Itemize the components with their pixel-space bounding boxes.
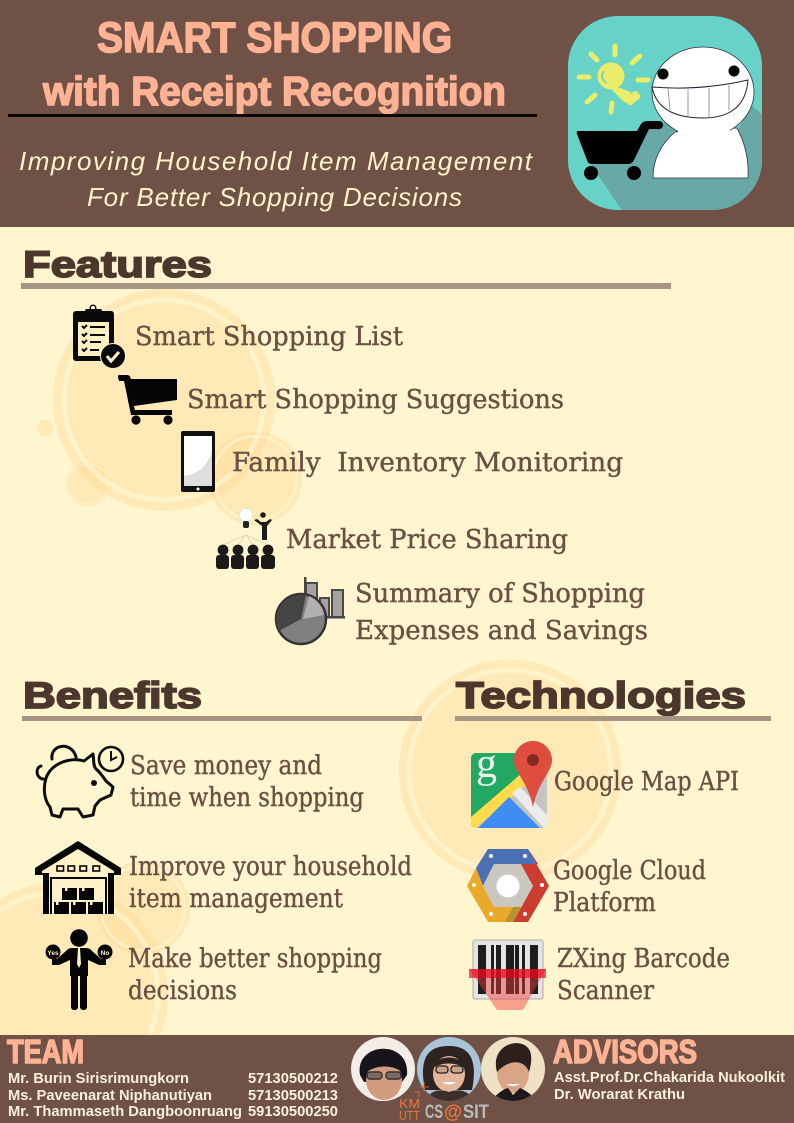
heading: benefits <box>22 675 422 721</box>
icon: man with yes and no <box>46 929 112 1010</box>
text: google cloud platform: Platform <box>553 888 656 918</box>
text: better decisions <box>128 944 382 1006</box>
icon: man with yes and no: No <box>101 950 109 957</box>
icon: app logo <box>568 16 764 212</box>
text: improve household <box>129 852 412 914</box>
heading: benefits: Benefits <box>23 675 202 716</box>
title: SMART SHOPPING <box>97 14 452 62</box>
text: zxing barcode scanner: ZXing Barcode <box>557 944 730 974</box>
text: better decisions: decisions <box>128 976 237 1006</box>
icon: barcode scanner <box>469 940 546 1010</box>
logo: CS@SIT: @ <box>444 1102 462 1123</box>
icon: pie and bar chart <box>276 577 345 644</box>
logo: KMUTT: UTT <box>399 1108 420 1123</box>
text: google cloud platform <box>553 856 706 918</box>
text: family inventory monitoring: Family Inventory Monitoring <box>232 448 623 478</box>
heading: features <box>21 244 671 289</box>
icon: man with yes and no: Yes <box>47 950 59 957</box>
logo: CS@SIT: SIT <box>463 1102 489 1123</box>
text: market price sharing: Market Price Sharing <box>286 525 568 555</box>
text: save money: Save money and <box>130 751 322 781</box>
icon: clipboard <box>73 305 126 368</box>
text: improve household: Improve your household <box>129 852 412 882</box>
panel: benefits <box>35 746 412 1010</box>
text: save money <box>130 751 364 813</box>
header panel <box>0 0 794 227</box>
team members: 57130500213 <box>248 1088 338 1104</box>
subtitle <box>19 146 534 212</box>
title <box>42 14 506 114</box>
text: summary of shopping expenses and savings: Summary of Shopping <box>355 579 645 609</box>
subtitle: Improving Household Item Management <box>19 146 534 176</box>
text: save money: time when shopping <box>130 783 364 813</box>
photo: team member three <box>481 1037 545 1102</box>
text: summary of shopping expenses and savings: Expenses and Savings <box>355 616 648 646</box>
footer panel <box>0 1033 794 1123</box>
text: improve household: item management <box>129 884 343 914</box>
icon: warehouse <box>35 841 121 914</box>
team heading: TEAM <box>7 1033 84 1070</box>
icon: google maps: g <box>476 741 497 787</box>
logo: CS@SIT: CS <box>425 1102 443 1123</box>
photo: team member two <box>417 1037 481 1102</box>
icon: piggy bank with clock <box>37 746 123 817</box>
text: smart shopping list: Smart Shopping List <box>135 322 404 352</box>
advisors names: Asst.Prof.Dr.Chakarida Nukoolkit <box>554 1070 785 1086</box>
panel: technologies <box>467 741 739 1010</box>
text: zxing barcode scanner <box>557 944 730 1006</box>
logo: KMUTT: KM <box>399 1096 420 1111</box>
panel: features <box>73 305 648 646</box>
text: better decisions: Make better shopping <box>128 944 382 974</box>
icon: people sharing <box>216 508 275 569</box>
text: smart shopping suggestions: Smart Shopping Suggestions <box>187 385 564 415</box>
logo: KMUTT <box>399 1082 429 1123</box>
icon: shopping cart <box>118 375 177 425</box>
logo: CS@SIT <box>425 1102 489 1123</box>
team members: Ms. Paveenarat Niphanutiyan <box>8 1088 212 1104</box>
icon: smartphone <box>181 431 215 492</box>
heading: features: Features <box>23 244 212 285</box>
icon: google cloud platform <box>467 849 549 922</box>
text: google cloud platform: Google Cloud <box>553 856 706 886</box>
subtitle: For Better Shopping Decisions <box>87 182 462 212</box>
team members <box>8 1071 338 1120</box>
text: zxing barcode scanner: Scanner <box>557 976 655 1006</box>
title: with Receipt Recognition <box>42 68 506 114</box>
team members: Mr. Burin Sirisrimungkorn <box>8 1071 189 1087</box>
photo: team member one <box>351 1037 415 1101</box>
advisors names: Dr. Worarat Krathu <box>554 1087 685 1103</box>
text: google map api: Google Map API <box>554 767 739 797</box>
text: summary of shopping expenses and savings <box>355 579 648 646</box>
team members: 57130500212 <box>248 1071 338 1087</box>
icon: google maps <box>471 741 552 832</box>
advisors names <box>554 1070 785 1103</box>
team members: 59130500250 <box>248 1104 338 1120</box>
heading: technologies: Technologies <box>456 675 746 716</box>
team members: Mr. Thammaseth Dangboonruang <box>8 1104 242 1120</box>
advisors heading: ADVISORS <box>553 1033 697 1070</box>
heading: technologies <box>455 675 771 721</box>
